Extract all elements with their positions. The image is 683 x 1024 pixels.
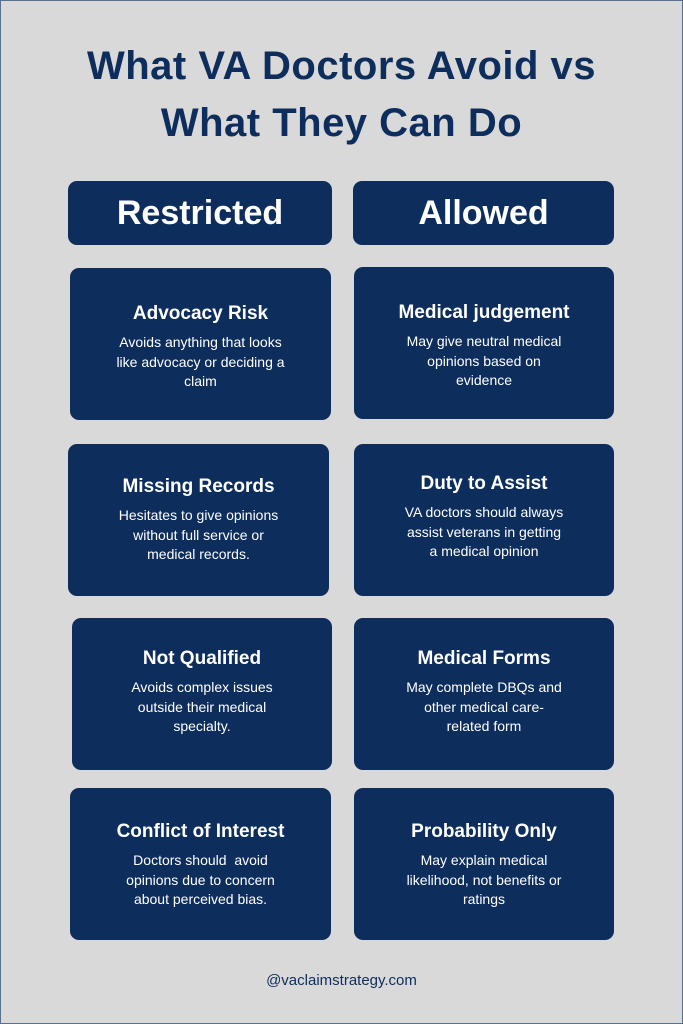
card: missing records: without full service or: [133, 526, 264, 542]
card: duty to assist: VA doctors should always: [405, 504, 563, 520]
card: conflict of interest: about perceived bias.: [134, 891, 267, 907]
card: medical forms: other medical care-: [424, 698, 544, 714]
card: probability only: Probability Only: [411, 821, 557, 842]
card: medical forms: Medical Forms: [417, 648, 551, 669]
card: medical judgement: May give neutral medical: [407, 333, 561, 349]
card: medical forms: related form: [447, 718, 521, 734]
card: medical forms: [354, 618, 614, 770]
card: missing records: medical records.: [147, 546, 250, 562]
card: duty to assist: a medical opinion: [430, 543, 538, 559]
card: probability only: [354, 788, 614, 940]
card: not qualified: Avoids complex issues: [131, 679, 273, 695]
header: allowed: Allowed: [418, 194, 549, 232]
card: medical judgement: opinions based on: [427, 352, 541, 368]
card: not qualified: [72, 618, 332, 770]
card: duty to assist: Duty to Assist: [420, 473, 548, 494]
card: medical judgement: evidence: [456, 372, 512, 388]
title: What They Can Do: [161, 101, 522, 145]
card: not qualified: Not Qualified: [143, 648, 261, 669]
card: conflict of interest: [70, 788, 331, 940]
card: medical judgement: Medical judgement: [398, 302, 570, 323]
card: probability only: likelihood, not benefits or: [407, 872, 561, 888]
card: duty to assist: assist veterans in getting: [407, 524, 561, 540]
card: advocacy risk: Avoids anything that looks: [119, 334, 282, 350]
card: probability only: May explain medical: [421, 852, 547, 868]
title: What VA Doctors Avoid vs: [87, 44, 596, 88]
card: missing records: Missing Records: [122, 476, 275, 497]
header: restricted: Restricted: [117, 194, 283, 232]
header: restricted: [68, 181, 332, 245]
card: conflict of interest: opinions due to concern: [126, 872, 275, 888]
card: not qualified: outside their medical: [138, 698, 266, 714]
card: medical forms: May complete DBQs and: [406, 679, 562, 695]
card: advocacy risk: claim: [184, 373, 217, 389]
card: advocacy risk: [70, 268, 331, 420]
card: medical judgement: [354, 267, 614, 419]
card: missing records: Hesitates to give opinions: [119, 507, 278, 523]
card: not qualified: specialty.: [173, 718, 231, 734]
card: advocacy risk: like advocacy or deciding a: [116, 354, 285, 370]
card: probability only: ratings: [463, 891, 505, 907]
card: duty to assist: [354, 444, 614, 596]
title: [87, 44, 596, 145]
card: advocacy risk: Advocacy Risk: [133, 303, 268, 324]
header: allowed: [353, 181, 614, 245]
card: conflict of interest: Conflict of Interest: [117, 821, 284, 842]
card: conflict of interest: Doctors should avoid: [133, 852, 268, 868]
card: missing records: [68, 444, 329, 596]
footer: @vaclaimstrategy.com: [266, 972, 417, 989]
